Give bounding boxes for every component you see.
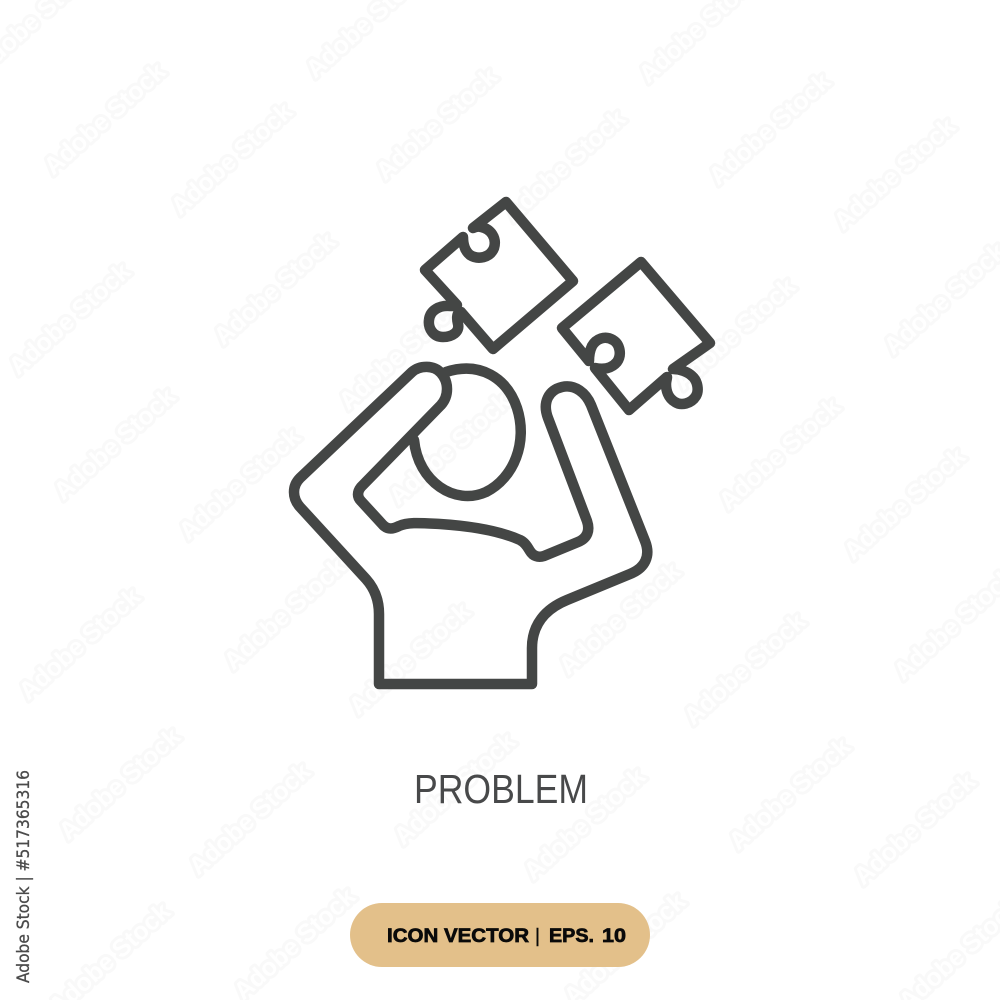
watermark pattern: Adobe Stock xyxy=(849,767,981,891)
watermark pattern: Adobe Stock xyxy=(344,597,476,721)
badge: icon vector eps 10 xyxy=(350,903,650,967)
badge: icon vector eps 10: ICON VECTOR xyxy=(387,926,529,947)
icon: person body and raised arms xyxy=(294,367,647,684)
watermark pattern: Adobe Stock xyxy=(519,762,651,886)
watermark pattern: Adobe Stock xyxy=(839,442,971,566)
badge: icon vector eps 10: 10 xyxy=(602,926,626,947)
watermark pattern: Adobe Stock xyxy=(54,722,186,846)
badge: icon vector eps 10: EPS. xyxy=(549,926,594,947)
watermark pattern: Adobe Stock xyxy=(174,422,306,546)
title: PROBLEM: PROBLEM xyxy=(414,766,588,812)
watermark pattern: Adobe Stock xyxy=(209,227,341,351)
vertical stock credit text: Adobe Stock | #517365316 xyxy=(14,770,34,983)
watermark pattern: Adobe Stock xyxy=(39,57,171,181)
watermark pattern: Adobe Stock xyxy=(219,552,351,676)
watermark pattern: Adobe Stock xyxy=(389,727,521,851)
badge: icon vector eps 10: | xyxy=(535,926,540,947)
watermark pattern: Adobe Stock xyxy=(554,557,686,681)
watermark pattern: Adobe Stock xyxy=(14,582,146,706)
watermark pattern: Adobe Stock xyxy=(714,392,846,516)
icon: person with puzzle pieces xyxy=(294,202,710,684)
watermark pattern: Adobe Stock xyxy=(49,382,181,506)
icon: right puzzle piece xyxy=(562,262,710,410)
icon: head xyxy=(414,369,521,496)
watermark pattern: Adobe Stock xyxy=(166,97,298,221)
watermark pattern: Adobe Stock xyxy=(669,272,801,396)
icon: left puzzle piece xyxy=(425,202,573,349)
watermark pattern: Adobe Stock xyxy=(679,607,811,731)
watermark pattern: Adobe Stock xyxy=(724,732,856,856)
watermark pattern: Adobe Stock xyxy=(384,387,516,511)
watermark pattern: Adobe Stock xyxy=(499,104,631,228)
watermark pattern: Adobe Stock xyxy=(4,257,136,381)
watermark pattern: Adobe Stock xyxy=(829,112,961,236)
watermark pattern: Adobe Stock xyxy=(704,67,836,191)
watermark pattern: Adobe Stock xyxy=(334,292,466,416)
watermark pattern: Adobe Stock xyxy=(184,757,316,881)
watermark pattern: Adobe Stock xyxy=(371,62,503,186)
